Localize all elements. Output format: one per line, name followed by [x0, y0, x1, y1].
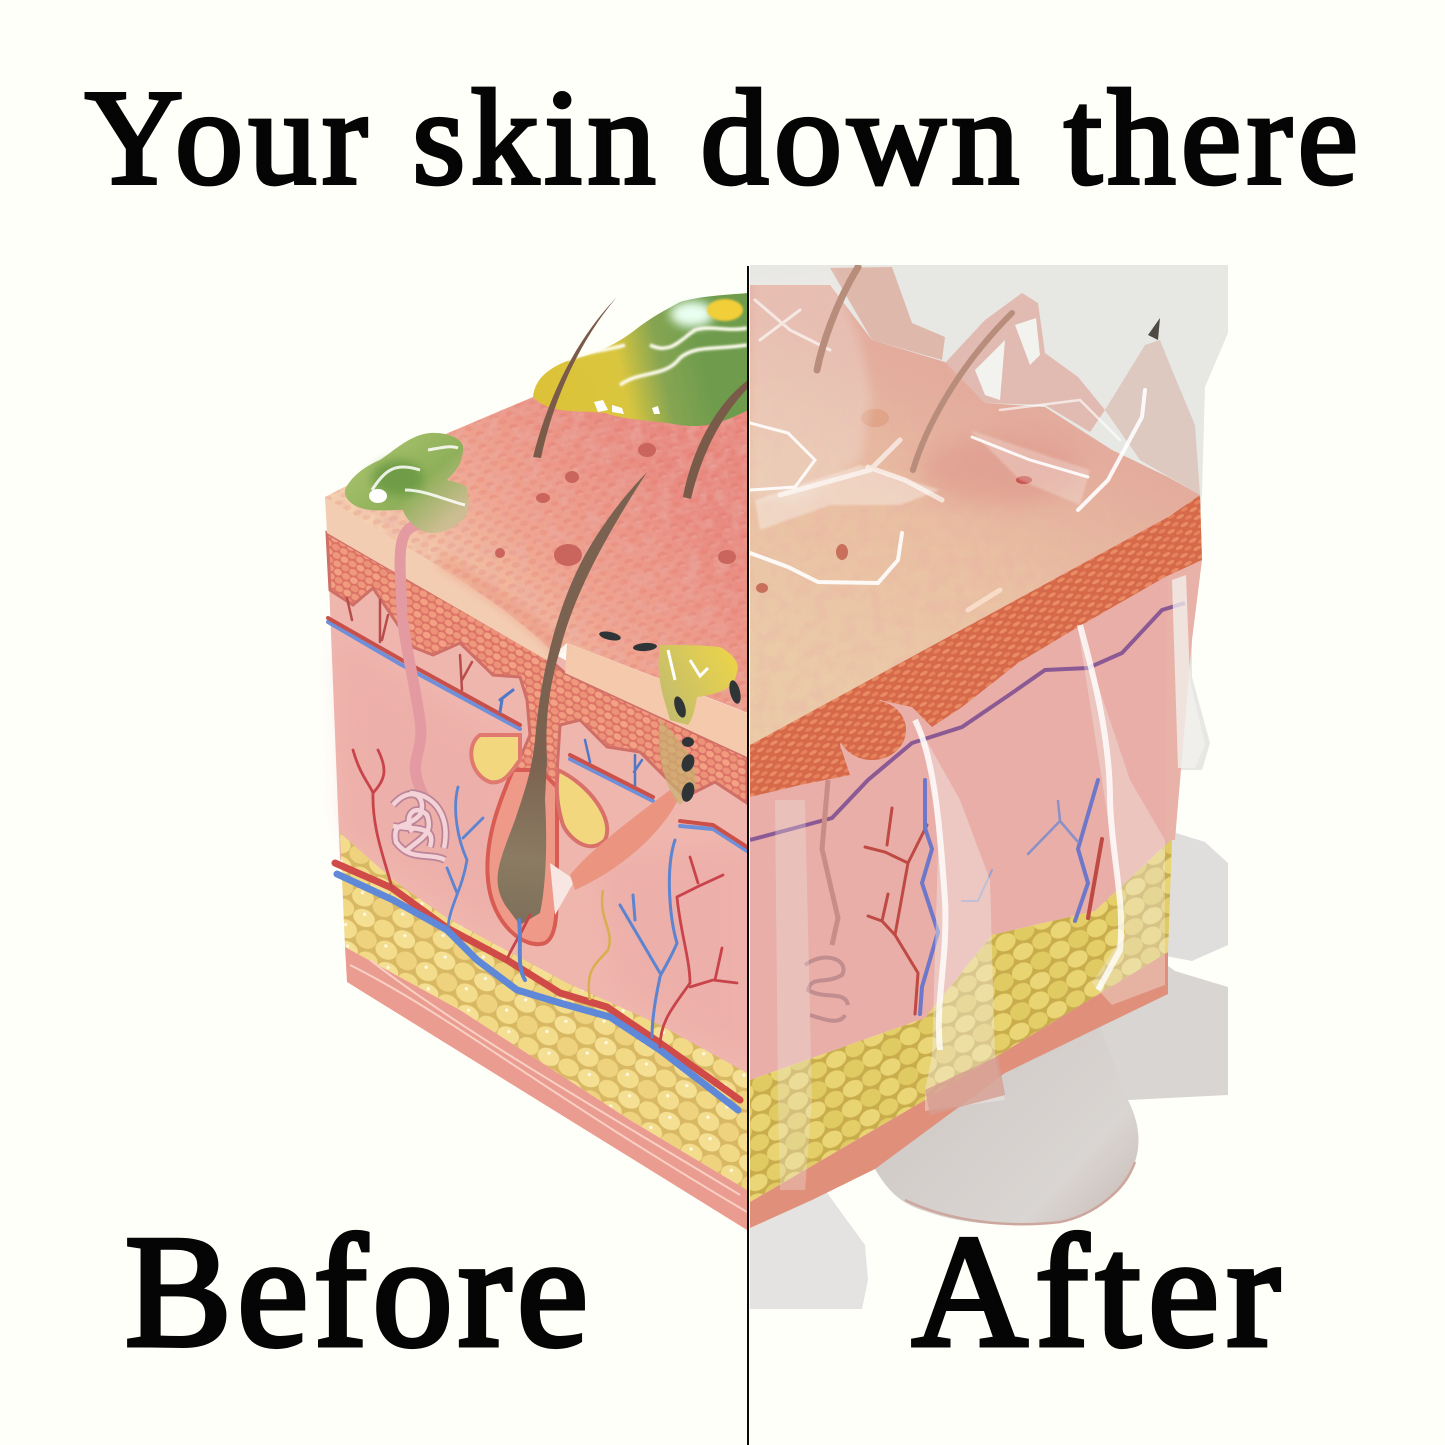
sebaceous gland right: [557, 770, 607, 846]
slime and bacteria colony: [598, 630, 743, 805]
sweat duct: [822, 780, 838, 945]
hair with bulb: [498, 472, 647, 925]
gel film upper left: [750, 268, 872, 500]
skin grain: [340, 398, 747, 710]
gel column two streak: [1080, 625, 1121, 990]
gel puddle rim: [905, 1162, 1135, 1224]
dermal vessel: [750, 603, 1185, 840]
nerve: [589, 890, 610, 1000]
main artery: [335, 863, 740, 1100]
left slime dark centre: [372, 460, 424, 496]
top surface: [750, 285, 1200, 745]
bottom tissue layer: [750, 952, 1168, 1228]
after label: After: [912, 1202, 1280, 1380]
dermis shading: [335, 746, 338, 818]
gel puddle upper right: [1160, 832, 1228, 961]
epidermis cell layer: [750, 495, 1202, 797]
pores: [756, 409, 1032, 593]
arrector muscle: [550, 790, 678, 915]
bacteria: [598, 630, 743, 803]
red vessel branches: [865, 808, 1102, 1014]
gel puddle right: [1090, 960, 1228, 1120]
illustration: before skin cross-section: [325, 293, 748, 1230]
epidermis dome: [838, 700, 906, 760]
surface hairs: [533, 297, 748, 499]
sweat duct: [400, 525, 423, 795]
gel column one streak: [915, 720, 945, 1050]
left slime fleck: [369, 489, 387, 503]
illustration: after skin cross-section in gel: [750, 265, 1228, 1309]
divider line: [747, 266, 749, 1445]
hair follicle sheath: [487, 770, 557, 944]
skin grain: [750, 285, 1200, 745]
bottom tissue layer: [345, 947, 747, 1230]
gel film swirl band: [755, 465, 940, 530]
dermis layer: [750, 517, 1172, 1080]
upper vessel right: [570, 740, 747, 851]
fat layer: [340, 833, 747, 1190]
red branches: [353, 750, 737, 1047]
colony highlights: [668, 650, 708, 680]
gel puddle lower left: [750, 1190, 868, 1309]
rim of the skin block: [325, 497, 553, 662]
title: Your skin down there: [85, 63, 1358, 213]
main vein: [337, 874, 738, 1110]
gel ridge centre: [945, 293, 1105, 432]
crease highlight: [440, 560, 560, 650]
gel film on surface right: [970, 430, 1090, 505]
dermis right edge: [1165, 500, 1202, 840]
epidermis cell layer: [327, 533, 747, 803]
sebaceous gland left: [471, 735, 520, 782]
fat layer: [750, 839, 1172, 1202]
sweat gland coil: [393, 793, 446, 860]
blue branches: [447, 787, 677, 1037]
gel ridge right: [1105, 340, 1200, 495]
slime glow: [670, 301, 714, 327]
gel column one: [915, 720, 1005, 1111]
tissue streaks: [350, 960, 747, 1212]
drip right: [1172, 575, 1205, 768]
dermis layer: [329, 590, 747, 1073]
gel column one base: [925, 1056, 1005, 1115]
right rim of the skin block: [565, 643, 747, 757]
upper vessel left: [328, 598, 520, 729]
dark speck in gel: [1148, 318, 1160, 340]
faded sweat gland: [805, 958, 848, 1021]
gel column two: [1077, 622, 1165, 1005]
large slime on top: [533, 293, 748, 426]
left slime highlights: [372, 447, 465, 505]
gel highlights on top: [750, 300, 1145, 610]
gel puddle center: [875, 1000, 1139, 1225]
pores: [495, 443, 736, 566]
blue vessels: [920, 780, 1098, 1014]
slime yellow spot: [707, 299, 743, 321]
slime flecks: [594, 400, 660, 414]
gel backdrop at top: [750, 265, 1228, 770]
small green slime on left: [345, 433, 469, 533]
gel ridge inner clear window: [975, 318, 1040, 400]
redness patch: [920, 435, 1080, 505]
top surface with pores: [325, 397, 747, 757]
gel ridge left: [830, 267, 945, 360]
before label: Before: [125, 1202, 588, 1380]
gel hairs: [817, 267, 1012, 470]
slime highlights: [568, 328, 747, 385]
gel column left: [775, 800, 812, 1190]
